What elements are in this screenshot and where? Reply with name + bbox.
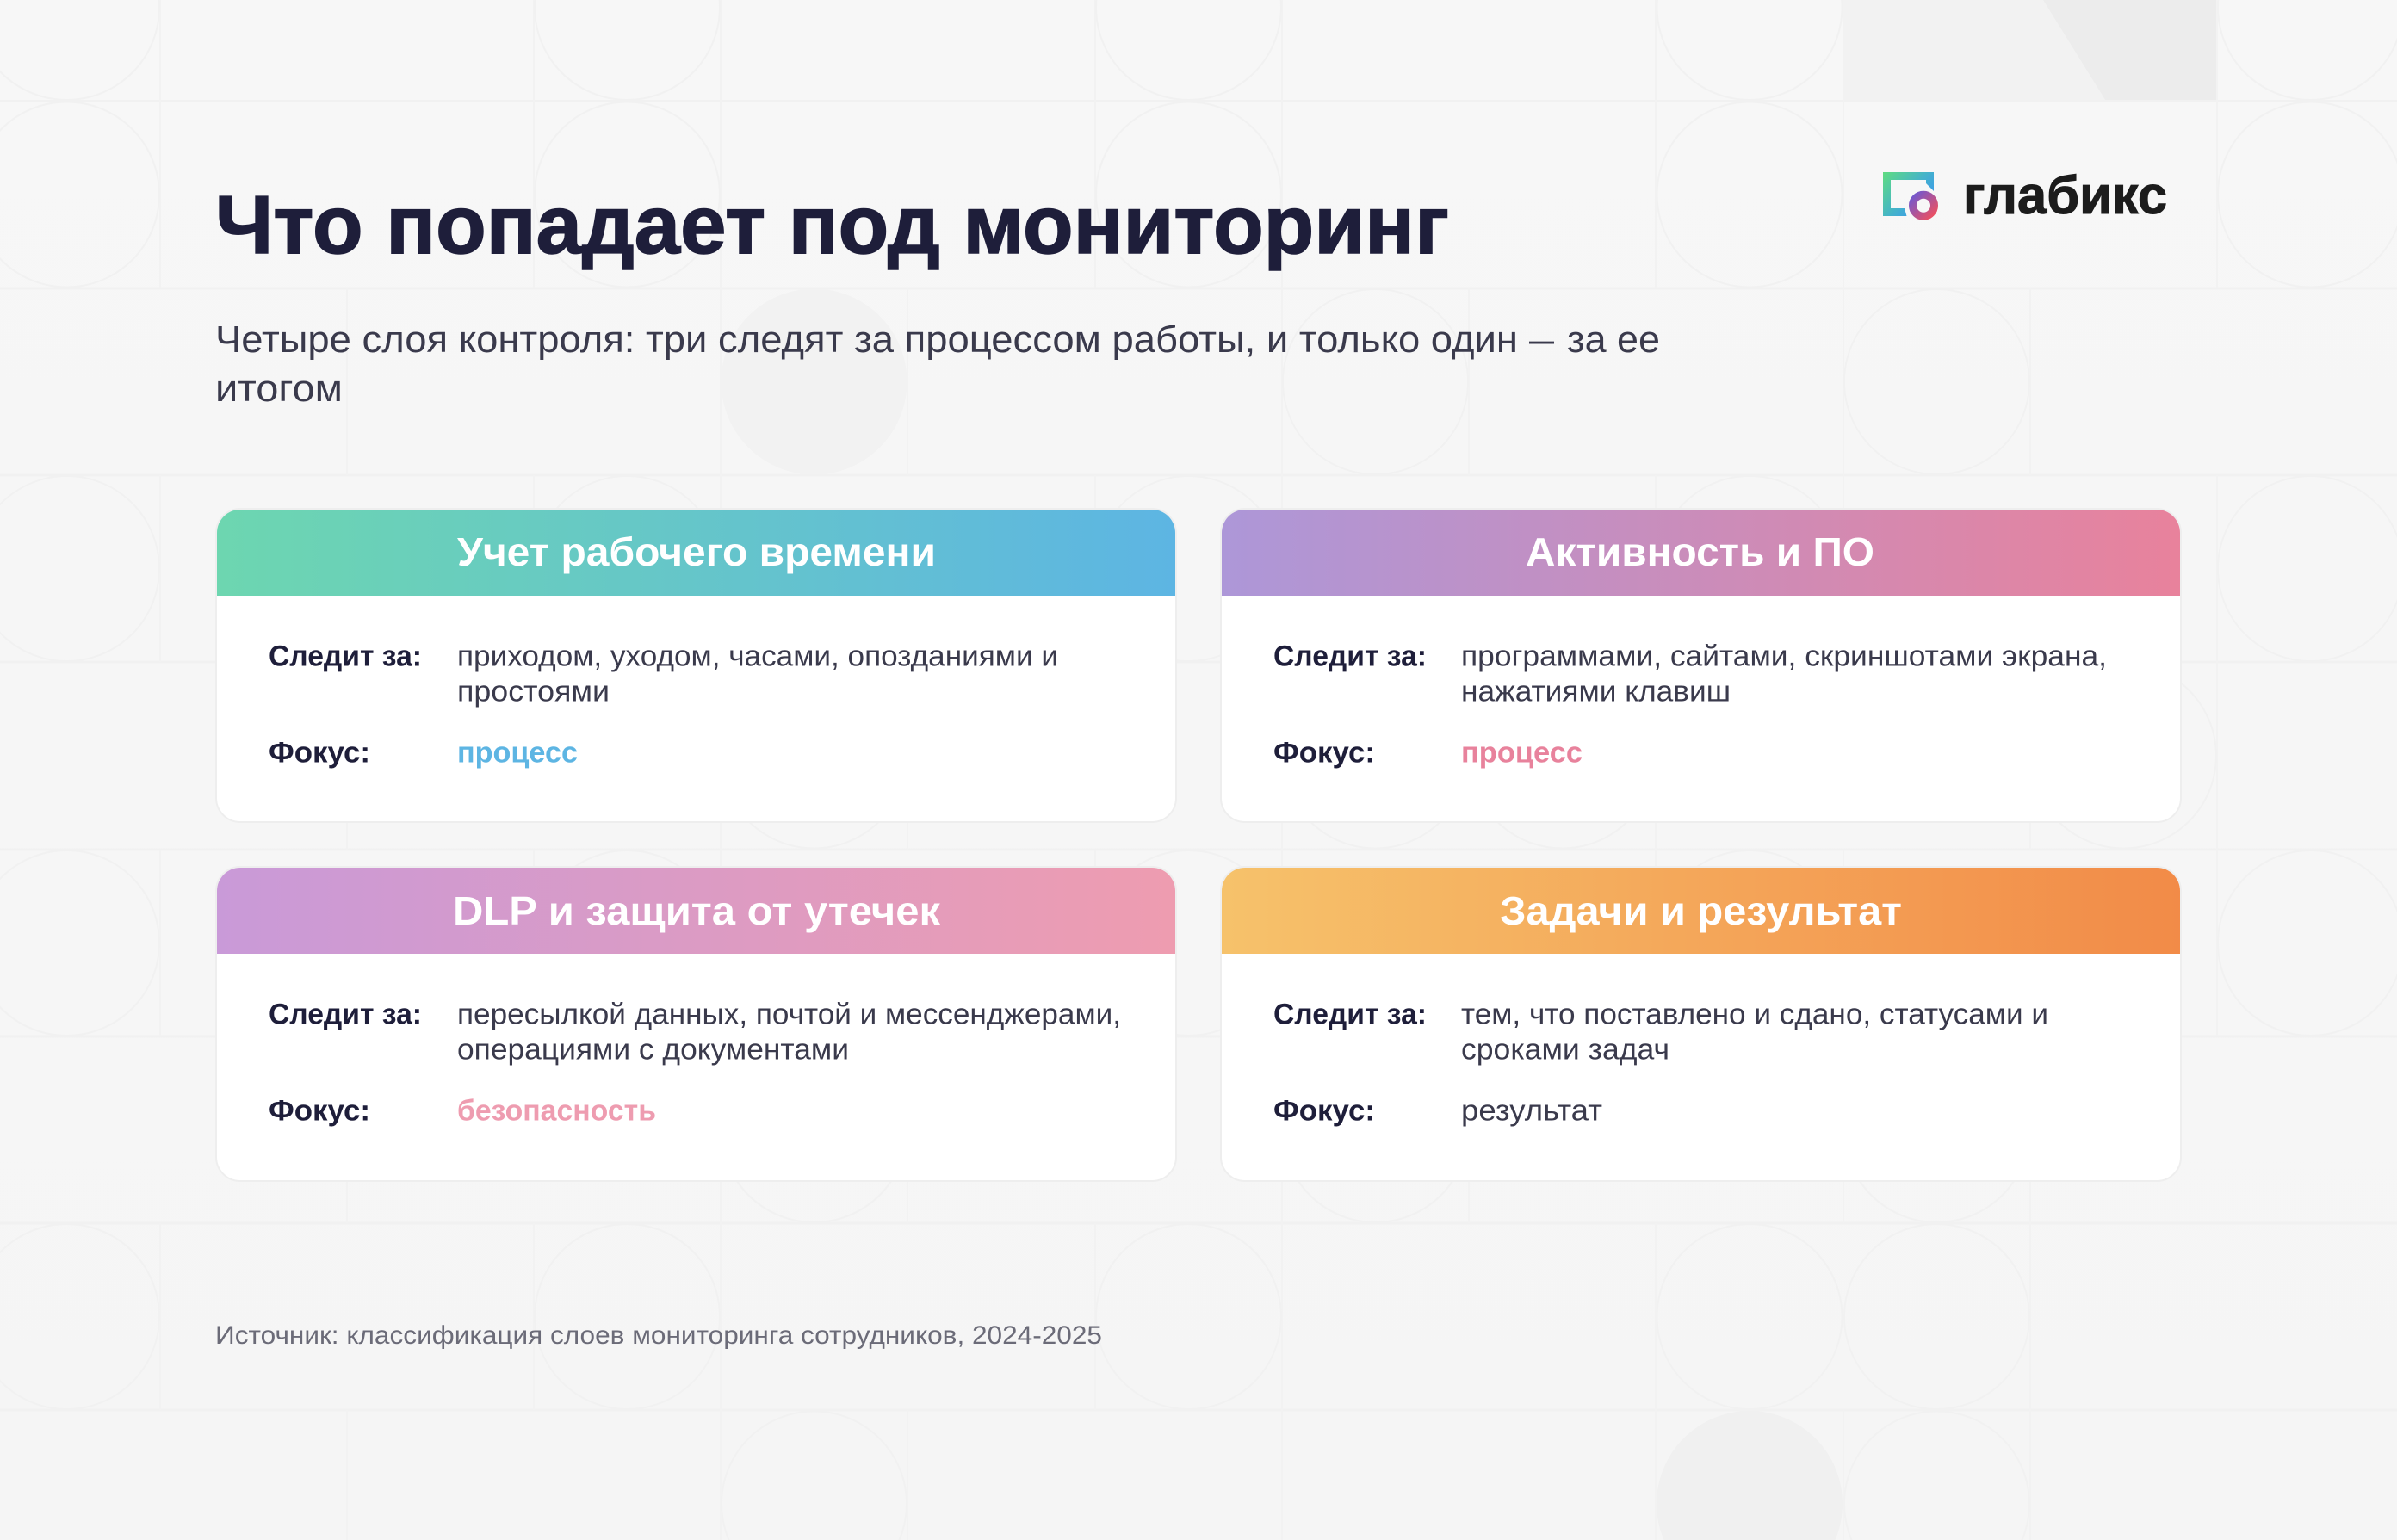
panel: Задачи и результат <box>1221 867 2181 1181</box>
subtitle <box>215 319 1660 410</box>
row: tracks: Следит за: <box>269 640 422 673</box>
row: focus: Фокус: <box>269 737 370 770</box>
logo wordmark: глабикс <box>1963 166 2167 226</box>
panel: Активность и ПО <box>1221 509 2181 822</box>
row: tracks: Следит за: <box>1273 640 1427 673</box>
card header <box>217 510 1175 596</box>
card header <box>217 868 1175 954</box>
row: tracks: простоями <box>457 675 610 708</box>
row: tracks: тем, что поставлено и сдано, статусами и <box>1461 999 2048 1031</box>
row: tracks: Следит за: <box>269 999 422 1031</box>
panel: Учет рабочего времени <box>216 509 1176 822</box>
subtitle: за ее <box>1567 319 1660 361</box>
row: focus: процесс <box>1461 737 1583 770</box>
row: focus: безопасность <box>457 1095 656 1128</box>
row: focus <box>1273 737 1583 770</box>
row: focus: Фокус: <box>1273 737 1375 770</box>
row: tracks <box>269 999 1121 1066</box>
row: tracks: операциями с документами <box>457 1033 849 1066</box>
logo <box>1883 166 2167 226</box>
row: focus <box>269 1095 656 1128</box>
subtitle: — <box>1529 319 1554 361</box>
row: focus: результат <box>1461 1095 1602 1128</box>
card heading: DLP и защита от утечек <box>453 888 941 933</box>
row: tracks: программами, сайтами, скриншотами экрана, <box>1461 640 2107 673</box>
row: tracks: сроками задач <box>1461 1033 1669 1066</box>
subtitle: Четыре слоя контроля: три следят за процессом работы, и только один <box>215 319 1518 361</box>
row: tracks <box>1273 999 2048 1066</box>
row: focus: Фокус: <box>269 1095 370 1128</box>
row: focus: процесс <box>457 737 578 770</box>
row: tracks: нажатиями клавиш <box>1461 675 1731 708</box>
card header <box>1222 510 2180 596</box>
row: tracks <box>269 640 1058 708</box>
icon: logo mark <box>1883 172 1934 216</box>
row: focus <box>1273 1095 1602 1128</box>
title: Что попадает под мониторинг <box>215 179 1449 271</box>
card heading: Учет рабочего времени <box>457 529 936 574</box>
row: focus <box>269 737 578 770</box>
row: tracks: Следит за: <box>1273 999 1427 1031</box>
card header <box>1222 868 2180 954</box>
panel: DLP и защита от утечек <box>216 867 1176 1181</box>
card heading: Задачи и результат <box>1500 888 1902 933</box>
row: focus: Фокус: <box>1273 1095 1375 1128</box>
row: tracks: пересылкой данных, почтой и мессенджерами, <box>457 999 1121 1031</box>
row: tracks <box>1273 640 2107 708</box>
subtitle: итогом <box>215 368 343 410</box>
card heading: Активность и ПО <box>1526 529 1874 574</box>
source note: Источник: классификация слоев мониторинга сотрудников, 2024-2025 <box>215 1321 1102 1350</box>
row: tracks: приходом, уходом, часами, опозданиями и <box>457 640 1058 673</box>
